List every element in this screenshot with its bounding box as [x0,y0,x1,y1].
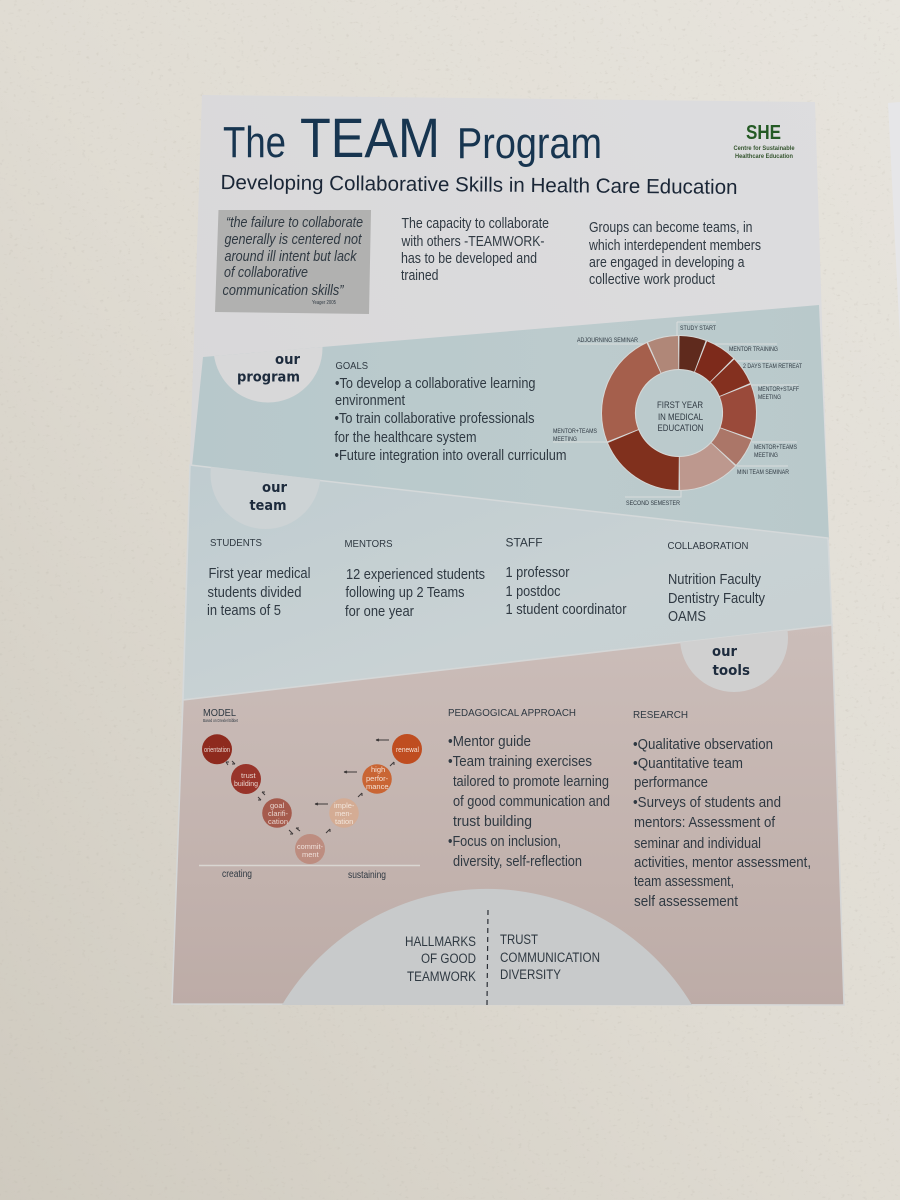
model stage labels: imple- [334,801,355,810]
text block: research: •Qualitative observation [633,737,773,753]
leader lines [553,322,800,497]
donut light ring [618,352,740,474]
text block: capacity to collaborate: The capacity to collaborate [402,216,549,232]
hallmarks label: OF GOOD [421,951,476,966]
team column: mentors [344,538,485,620]
donut segment labels: MENTOR+TEAMS [553,428,598,435]
text block: pedagogical approach [448,707,610,870]
team column: students: in teams of 5 [207,603,281,619]
donut segment labels: MEETING [758,394,781,401]
donut segment labels [553,325,802,507]
quote box: around ill intent but lack [224,249,357,265]
poster [172,95,844,1005]
donut segment labels: MINI TEAM SEMINAR [737,469,789,476]
model arrows [226,739,394,834]
text block: pedagogical approach: PEDAGOGICAL APPROACH [448,707,576,719]
title: TEAM [300,106,440,169]
model baseline [199,864,420,866]
dashed divider [487,910,488,1005]
donut segment labels: ADJOURNING SEMINAR [577,337,638,344]
title [223,106,602,169]
circle: our team [210,468,320,529]
model stage labels: ment [302,850,320,859]
V-shaped team model diagram [199,734,422,881]
donut segment labels: MEETING [553,436,577,443]
text block: capacity to collaborate: with others -TEAMWORK- [401,234,545,250]
logo: SHE: Centre for Sustainable [734,145,795,152]
text block: groups become teams: are engaged in developing a [589,255,745,271]
band: our tools background [172,625,844,1005]
model stage labels: mance [366,782,389,791]
text block: research: team assessment, [634,874,734,890]
logo: SHE: SHE [746,122,781,144]
team column: students: First year medical [208,566,310,582]
team column: collaboration: COLLABORATION [668,540,748,552]
team column: students: students divided [208,585,302,601]
hallmarks list: DIVERSITY [500,967,561,982]
donut segment labels: STUDY START [680,325,716,332]
team column: collaboration: Dentistry Faculty [668,591,766,607]
neighbouring poster edge [888,102,900,340]
text block: research: •Quantitative team [633,756,743,772]
donut segment labels: MEETING [754,452,778,459]
team column: mentors: MENTORS [344,538,392,550]
subtitle: Developing Collaborative Skills in Health Care Education [220,171,738,199]
team column: collaboration: Nutrition Faculty [668,572,762,588]
heading: our tools: tools [712,663,750,679]
heading: our program: our [275,352,300,368]
circle: our program [214,347,322,402]
logo: SHE [734,122,795,160]
model heading: MODEL [203,707,236,719]
donut centre label: IN MEDICAL [658,412,703,423]
donut centre label: EDUCATION [658,423,704,434]
text block: goals: •To develop a collaborative learning [335,376,536,392]
model stage labels: tation [335,817,353,826]
model stage labels: commit- [297,842,323,851]
title: The [223,118,286,167]
donut segments [593,327,765,499]
heading: our tools: our [712,644,737,660]
logo: SHE: Healthcare Education [735,153,793,160]
hallmarks list [500,932,600,982]
text block: pedagogical approach: •Focus on inclusion, [448,834,561,850]
model axis labels: creating [222,869,252,880]
model stage labels: goal [270,801,285,810]
team column: staff: 1 postdoc [506,584,560,600]
quote box [215,210,371,314]
text block: goals: •Future integration into overall curriculum [334,448,566,464]
text block: pedagogical approach: trust building [453,814,532,830]
model stage labels: renewal [396,745,419,754]
donut segment labels: 2 DAYS TEAM RETREAT [743,363,802,370]
quote box: of collaborative [224,265,308,281]
donut segment labels: MENTOR+STAFF [758,386,799,393]
text block: groups become teams: which interdependent members [588,238,761,254]
model heading: Based on Drexler/Sibbet [203,718,239,723]
text block: research: seminar and individual [634,836,761,852]
text block: capacity to collaborate: trained [401,268,438,284]
text block: pedagogical approach: •Team training exercises [448,754,592,770]
team column: staff [506,538,627,618]
team column: students [207,537,310,619]
hallmarks of good teamwork semicircle [282,889,692,1005]
team column: mentors: for one year [345,604,414,620]
text block: research: performance [634,775,708,791]
text block: pedagogical approach: of good communication and [453,794,610,810]
poster paper [172,95,844,1005]
text block: goals: •To train collaborative professionals [334,411,534,427]
model stage labels: building [234,779,258,788]
text block: goals [334,360,566,464]
circle: our tools [680,631,788,692]
V-shaped team model diagram: sustaining [348,870,386,881]
donut centre label: FIRST YEAR [657,400,703,411]
team column: mentors: 12 experienced students [346,567,485,583]
model stage labels: orientation [204,745,230,754]
model stages [202,734,422,864]
heading: our team [250,480,287,514]
text block: capacity to collaborate: has to be developed and [401,251,537,267]
team column: students: STUDENTS [210,537,262,549]
title: Program [457,119,602,168]
text block: pedagogical approach: diversity, self-reflection [453,854,582,870]
model stage labels: men- [335,809,353,818]
model stage labels: clarifi- [268,809,289,818]
heading: our team: team [250,498,286,514]
model stage labels: cation [268,817,288,826]
text block: pedagogical approach: •Mentor guide [448,734,531,750]
donut centre label [657,400,704,434]
text block: research [633,709,811,910]
model stage labels: trust [241,771,257,780]
text block: pedagogical approach: tailored to promote learning [453,774,609,790]
text block: research: RESEARCH [633,709,688,721]
text block: research: mentors: Assessment of [634,815,776,831]
text block: research: self assessement [634,894,738,910]
hallmarks label [405,934,476,984]
text block: groups become teams: collective work product [589,272,715,288]
text block: goals: for the healthcare system [334,430,476,446]
band: our team background [183,465,832,700]
donut segment labels: SECOND SEMESTER [626,500,680,507]
team column: collaboration [668,540,766,625]
text block: research: •Surveys of students and [633,795,781,811]
text block: groups become teams [588,220,761,288]
text block: groups become teams: Groups can become teams, in [589,220,752,236]
team column: staff: STAFF [506,538,542,550]
heading: our program [237,352,300,386]
team column: staff: 1 professor [506,565,570,581]
heading: our team: our [262,480,287,496]
donut segment labels: MENTOR+TEAMS [754,444,798,451]
heading: our tools [712,644,750,679]
quote box: communication skills” [222,283,345,299]
team column: staff: 1 student coordinator [506,602,627,618]
model stage labels: perfor- [366,774,389,783]
hallmarks list: COMMUNICATION [500,950,600,965]
band: our program background [192,305,829,540]
hallmarks list: TRUST [500,932,538,947]
quote box: “the failure to collaborate [226,215,363,231]
text block: research: activities, mentor assessment, [634,855,811,871]
text block: goals: GOALS [336,360,368,372]
model stage labels [204,745,419,859]
team column: mentors: following up 2 Teams [346,585,464,601]
heading: our program: program [237,370,300,386]
donut chart: first year in medical education [553,322,802,507]
hallmarks label: HALLMARKS [405,934,476,949]
team column: collaboration: OAMS [668,609,706,625]
hallmarks label: TEAMWORK [407,969,476,984]
donut segment labels: MENTOR TRAINING [729,346,778,353]
quote box: Yeager 2005 [312,300,336,306]
model stage labels: high [371,765,385,774]
text block: capacity to collaborate [401,216,549,284]
text block: goals: environment [335,393,405,409]
quote box: generally is centered not [224,232,362,248]
